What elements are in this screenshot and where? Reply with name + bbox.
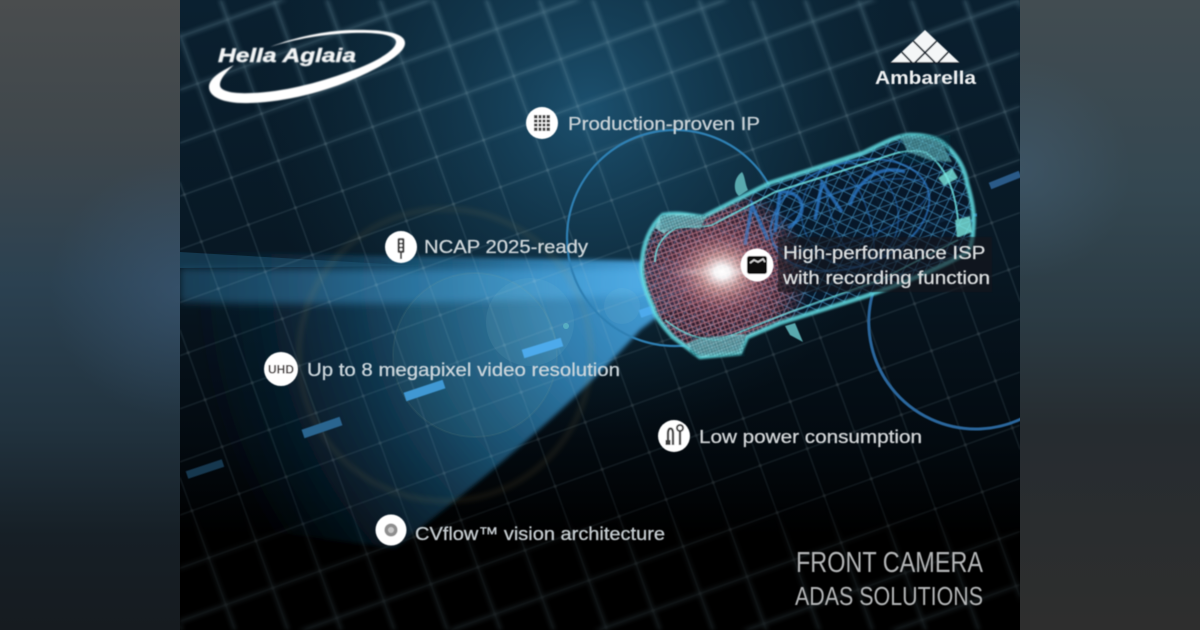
car wireframe	[638, 131, 978, 361]
icon: lens	[376, 514, 406, 546]
logo wordmark: Ambarella	[875, 68, 977, 88]
label: Up to 8 megapixel video resolution	[307, 359, 620, 380]
label: Production-proven IP	[568, 113, 760, 134]
feature: NCAP 2025-ready	[385, 231, 589, 263]
icon: traffic light	[385, 231, 417, 263]
car interior mesh	[642, 136, 974, 357]
logo: Hella Aglaia	[209, 30, 405, 103]
label: with recording function	[782, 267, 990, 288]
icon: plug and bulb	[658, 420, 690, 452]
lens flare rings	[299, 209, 640, 501]
feature: 8 megapixel video	[264, 352, 620, 386]
logo pyramid of diamonds	[890, 30, 960, 63]
icon: UHD badge: UHD	[268, 364, 294, 376]
car mirrors	[735, 172, 803, 342]
logo swoosh	[209, 30, 405, 103]
icon: UHD badge	[264, 352, 298, 386]
title: Front Camera ADAS Solutions: ADAS SOLUTIONS	[795, 581, 983, 611]
road lane dashes	[187, 174, 1020, 475]
circle behind car	[567, 130, 783, 346]
feature: Production-proven IP	[526, 107, 760, 139]
logo: Ambarella	[875, 30, 977, 88]
feature: High-performance ISP	[740, 237, 992, 292]
icon: chip grid	[526, 107, 558, 139]
circle right of car	[869, 215, 1025, 429]
dark label backing	[778, 237, 992, 292]
label: High-performance ISP	[783, 242, 985, 263]
car body outline	[642, 135, 974, 357]
label: NCAP 2025-ready	[424, 236, 589, 257]
title: Front Camera ADAS Solutions	[795, 547, 984, 611]
panel: left blurred side band	[0, 0, 180, 630]
icon: picture	[740, 248, 774, 282]
feature: Low power consumption	[658, 420, 922, 452]
panel: right blurred side band	[1020, 0, 1200, 630]
perspective grid	[180, 0, 1020, 630]
light beam from the car	[180, 252, 700, 548]
panel: central dark scene	[180, 0, 1025, 630]
label: Low power consumption	[699, 426, 922, 447]
label: CVflow™ vision architecture	[415, 523, 665, 544]
feature: CVflow vision architecture	[376, 514, 665, 546]
title: Front Camera ADAS Solutions: FRONT CAMERA	[796, 547, 984, 579]
headlight flare	[659, 218, 778, 324]
car bumper and rear highlights	[655, 135, 972, 357]
logo wordmark: Hella Aglaia	[218, 46, 357, 67]
